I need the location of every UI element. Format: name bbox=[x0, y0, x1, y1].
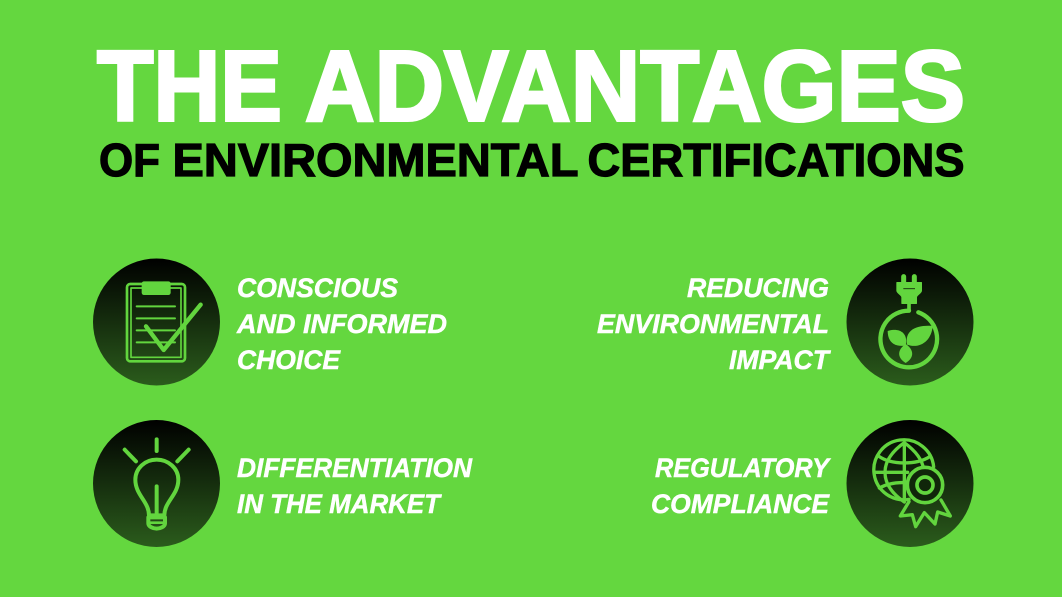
label: CHOICE bbox=[237, 345, 341, 375]
subtitle: ENVIRONMENTAL bbox=[172, 134, 578, 186]
icon: plug with leaves bbox=[846, 258, 974, 386]
title: THE bbox=[97, 30, 282, 142]
subtitle: CERTIFICATIONS bbox=[588, 134, 964, 186]
label: DIFFERENTIATION bbox=[237, 453, 472, 483]
panel: regulatory compliance bbox=[651, 420, 974, 547]
label: REGULATORY bbox=[655, 453, 832, 483]
icon: light bulb bbox=[93, 420, 220, 547]
label: ENVIRONMENTAL bbox=[597, 309, 829, 339]
label: COMPLIANCE bbox=[651, 489, 830, 519]
label: REDUCING bbox=[687, 273, 829, 303]
label: IMPACT bbox=[729, 345, 831, 375]
subtitle bbox=[99, 134, 964, 186]
panel: differentiation in the market bbox=[93, 420, 472, 547]
subtitle: OF bbox=[99, 134, 160, 186]
title: ADVANTAGES bbox=[305, 30, 965, 142]
icon: globe with award ribbon bbox=[846, 420, 974, 547]
icon: clipboard with check mark bbox=[93, 258, 220, 386]
label: IN THE MARKET bbox=[237, 489, 442, 519]
label: CONSCIOUS bbox=[237, 273, 398, 303]
label: AND INFORMED bbox=[236, 309, 447, 339]
panel: conscious and informed choice bbox=[93, 258, 447, 386]
panel: reducing environmental impact bbox=[597, 258, 974, 386]
